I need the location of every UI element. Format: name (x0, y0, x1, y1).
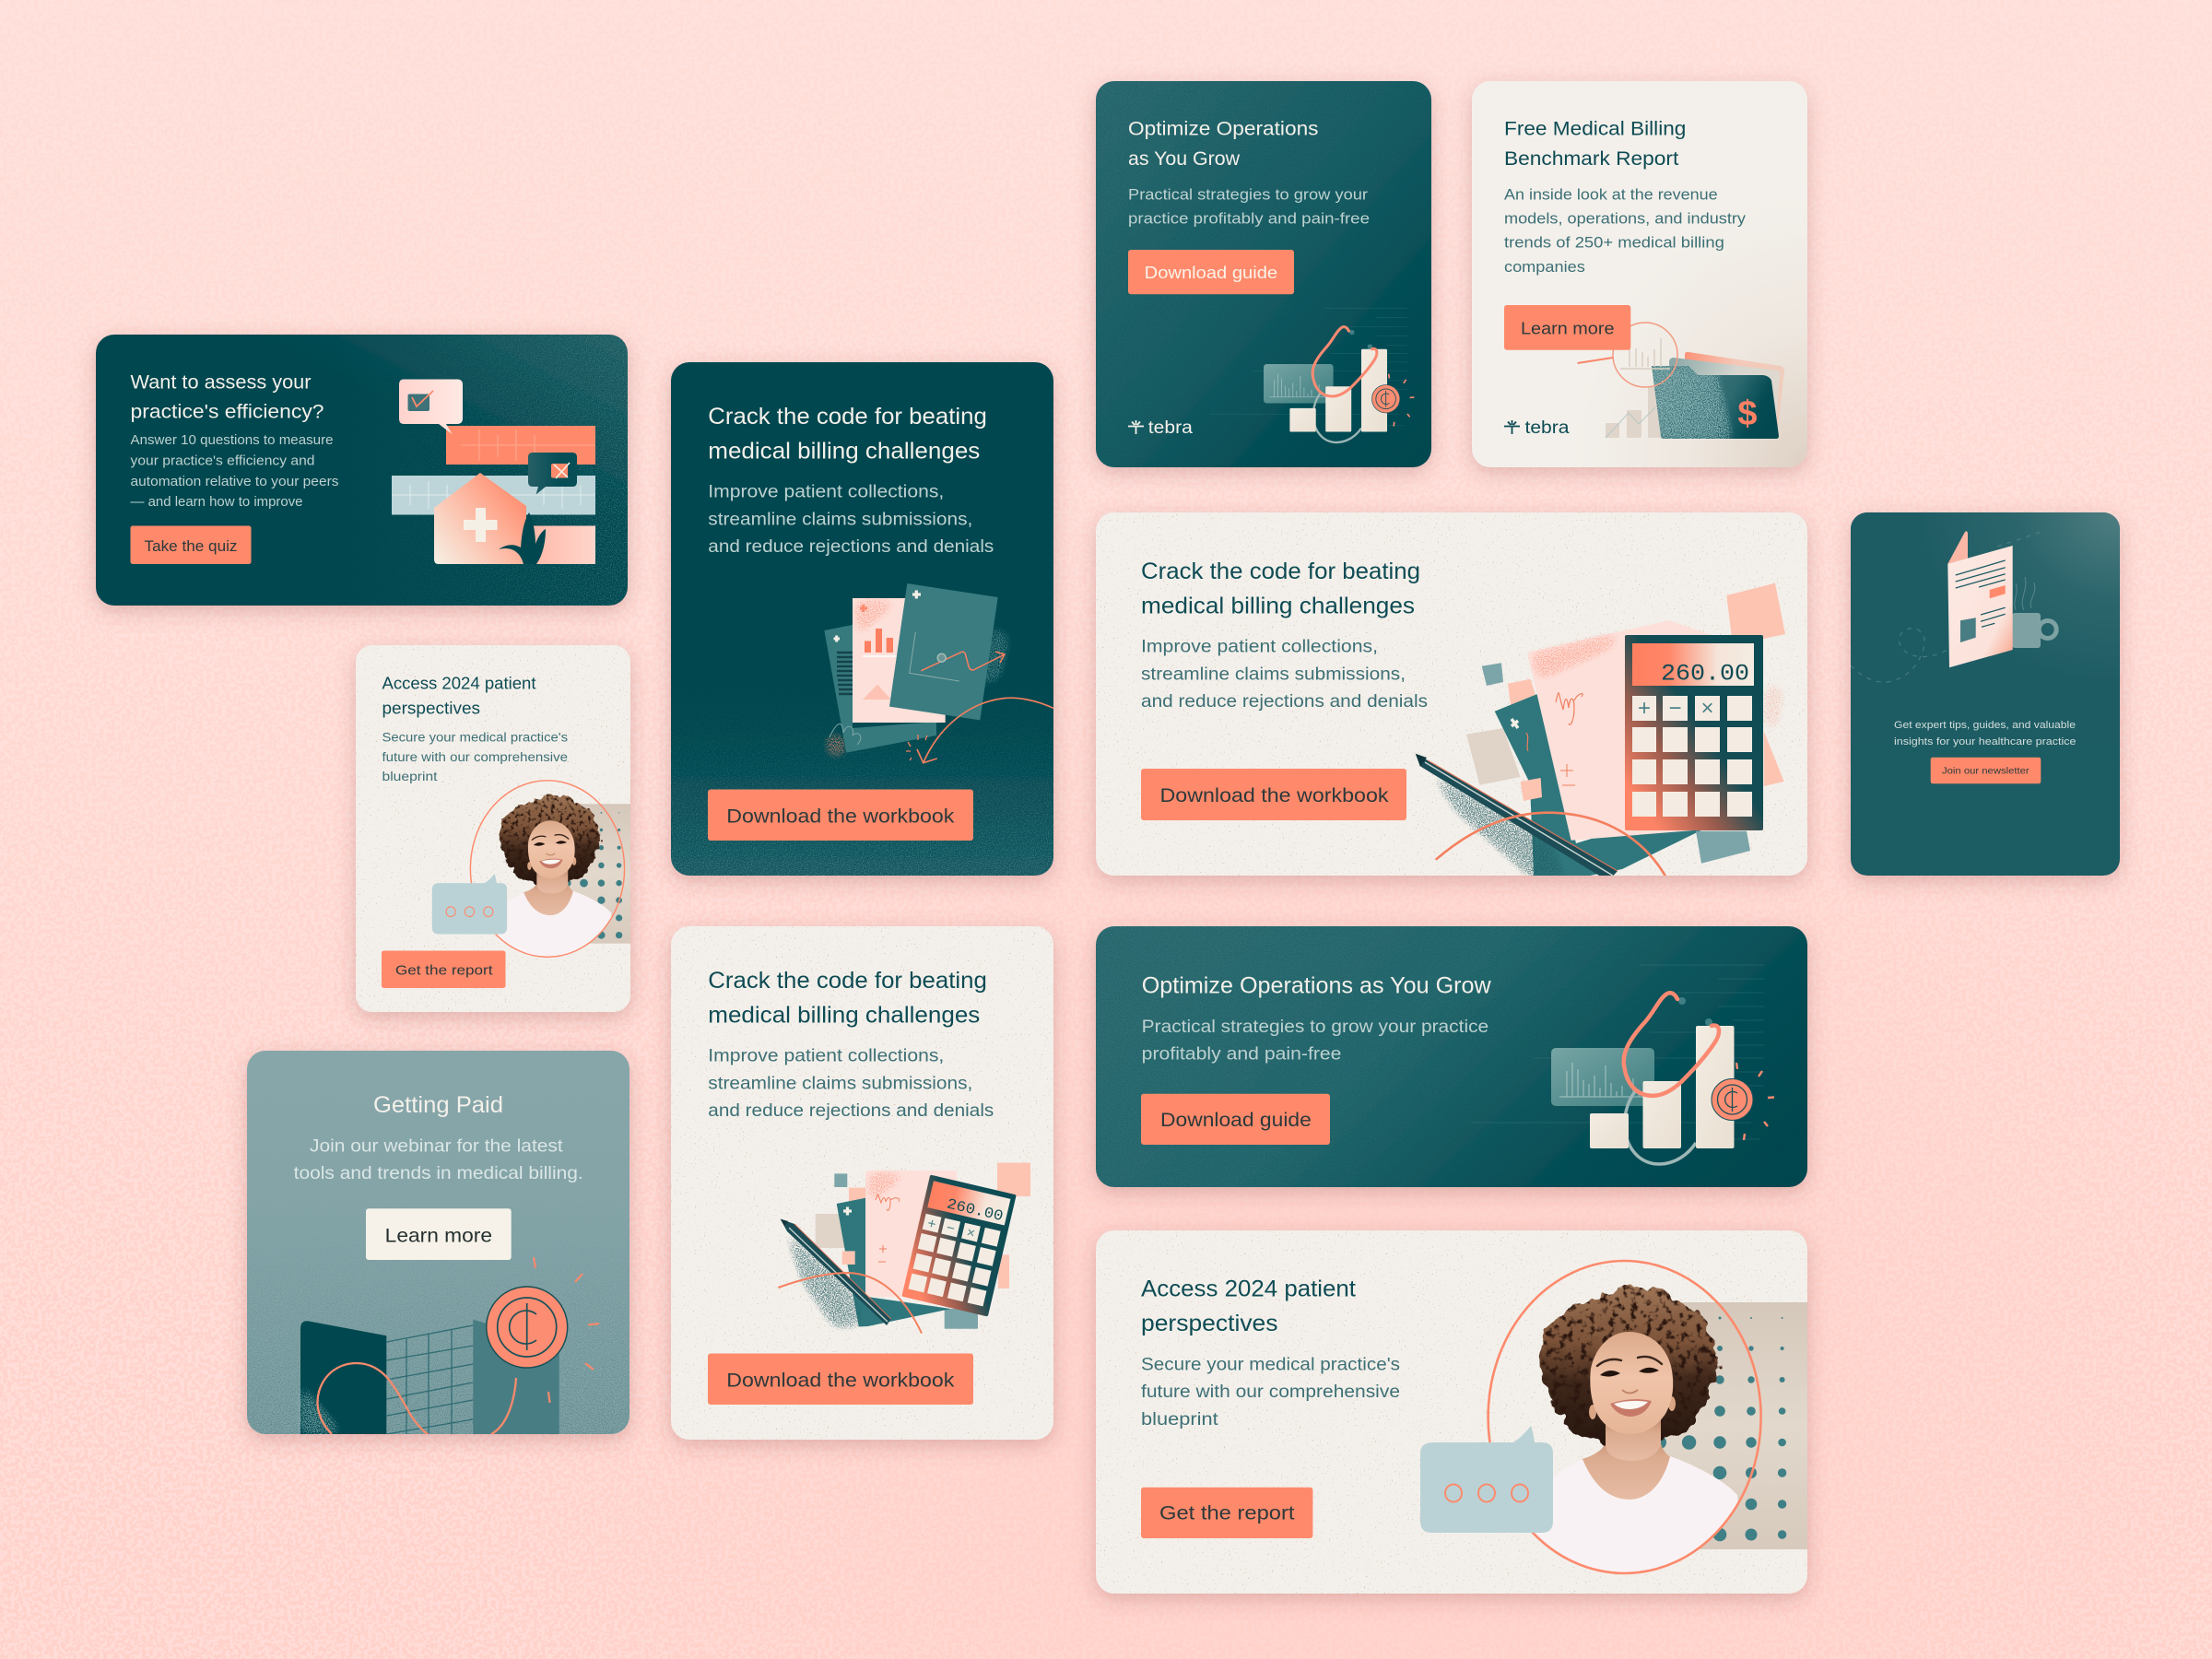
button: Join our newsletter (1942, 765, 2030, 776)
body text (1894, 720, 2076, 747)
logo: tebra: tebra (1148, 418, 1193, 438)
panel: access report card small (356, 645, 651, 1012)
body text: — and learn how to improve (131, 495, 302, 510)
body text (382, 730, 568, 783)
button (1931, 758, 2041, 783)
body text (1141, 637, 1428, 712)
button: Download the workbook (726, 1370, 955, 1391)
heading: Want to assess your (131, 371, 312, 393)
illustration: calculator, papers and pencil: − (1668, 696, 1682, 721)
button (131, 525, 251, 564)
heading: perspectives (1141, 1311, 1277, 1336)
body text: Secure your medical practice's (382, 730, 568, 745)
body text: your practice's efficiency and (131, 453, 315, 468)
heading: Crack the code for beating (1141, 559, 1420, 584)
body text: insights for your healthcare practice (1894, 736, 2076, 747)
button: Get the report (1159, 1503, 1295, 1524)
heading: Crack the code for beating (708, 404, 987, 429)
illustration: calculator and pencil: − (945, 1220, 957, 1237)
body text: Join our webinar for the latest (310, 1135, 563, 1156)
button (708, 789, 973, 841)
illustration: calculator and pencil: × (965, 1225, 977, 1241)
page background (0, 585, 2212, 1659)
heading: Benchmark Report (1504, 147, 1678, 170)
heading (708, 968, 987, 1029)
button (1141, 1488, 1312, 1538)
body text: Get expert tips, guides, and valuable (1894, 720, 2076, 731)
panel: newsletter card (1851, 512, 2120, 876)
heading: medical billing challenges (1141, 594, 1415, 619)
body text: practice profitably and pain-free (1128, 211, 1370, 228)
body text: streamline claims submissions, (708, 1073, 972, 1093)
heading (708, 404, 987, 465)
heading: Getting Paid (373, 1092, 503, 1118)
button (1504, 305, 1630, 350)
body text: streamline claims submissions, (1141, 664, 1406, 684)
logo: tebra (1128, 418, 1193, 438)
illustration: calculator and pencil: 260.00 (945, 1195, 1005, 1225)
illustration: calculator, papers and pencil: + (1638, 696, 1651, 721)
body text: companies (1504, 259, 1585, 276)
illustration: patient portrait (1420, 1261, 1807, 1585)
body text: Improve patient collections, (708, 1045, 944, 1065)
logo: tebra: tebra (1524, 418, 1570, 438)
button (1141, 1094, 1330, 1145)
body text: models, operations, and industry (1504, 211, 1747, 228)
button: Download the workbook (1159, 785, 1389, 806)
button: Download guide (1160, 1110, 1312, 1131)
panel: workbook card light (671, 926, 1053, 1440)
panel: benchmark report card (1472, 81, 1807, 467)
button (382, 951, 505, 988)
heading (1128, 118, 1318, 170)
illustration: folder and magnifier: $ (1737, 394, 1758, 433)
panel: access report wide card (1096, 1230, 1807, 1594)
illustration: calculator, papers and pencil (1416, 583, 1785, 881)
illustration: calculator, papers and pencil: 260.00 (1661, 661, 1749, 688)
panel: quiz banner (96, 335, 628, 606)
body text: blueprint (382, 770, 438, 783)
body text: Practical strategies to grow your practice (1142, 1017, 1488, 1037)
heading: Optimize Operations as You Grow (1142, 972, 1492, 998)
heading: Crack the code for beating (708, 968, 987, 994)
heading: practice's efficiency? (131, 400, 324, 422)
panel: webinar card (247, 1051, 629, 1438)
heading (382, 675, 536, 717)
logo: tebra (1504, 418, 1570, 438)
illustration: building and coin (300, 1257, 599, 1438)
heading: as You Grow (1128, 147, 1240, 170)
button: Download the workbook (726, 806, 955, 827)
heading: Free Medical Billing (1504, 118, 1686, 140)
body text: Answer 10 questions to measure (131, 433, 334, 448)
heading (1504, 118, 1686, 170)
button (366, 1208, 512, 1260)
heading: perspectives (382, 699, 480, 717)
illustration: calculator and pencil: + (926, 1216, 937, 1232)
body text: blueprint (1141, 1409, 1218, 1430)
body text (131, 433, 339, 510)
panel: workbook card dark (671, 362, 1053, 876)
body text: tools and trends in medical billing. (294, 1163, 583, 1183)
heading (1141, 1277, 1356, 1336)
heading: Optimize Operations (1128, 118, 1318, 140)
illustration: clinic with speech bubbles (392, 380, 595, 564)
heading: medical billing challenges (708, 1003, 980, 1029)
body text (708, 1045, 994, 1121)
button (708, 1353, 973, 1405)
button: Get the report (395, 962, 493, 979)
body text: and reduce rejections and denials (708, 536, 994, 557)
illustration: chart and stethoscope (1471, 965, 1774, 1164)
illustration: chart and stethoscope (1209, 308, 1414, 442)
heading (131, 371, 324, 422)
panel: optimize operations tall card (1096, 81, 1431, 467)
illustration: folder and magnifier (1578, 323, 1784, 441)
body text: future with our comprehensive (1141, 1382, 1400, 1402)
body text: future with our comprehensive (382, 750, 568, 764)
body text: trends of 250+ medical billing (1504, 235, 1724, 252)
body text: streamline claims submissions, (708, 509, 972, 529)
button: Download guide (1145, 264, 1277, 282)
illustration: patient portrait (431, 780, 630, 959)
button (1128, 250, 1294, 294)
heading: Access 2024 patient (1141, 1277, 1356, 1302)
body text: and reduce rejections and denials (708, 1100, 994, 1121)
panel: optimize operations wide card (1096, 926, 1807, 1187)
body text: and reduce rejections and denials (1141, 691, 1428, 712)
body text (294, 1135, 583, 1183)
body text: profitably and pain-free (1142, 1044, 1342, 1065)
body text (1141, 1355, 1400, 1430)
panel: workbook wide card (1096, 512, 1807, 881)
body text: Improve patient collections, (1141, 637, 1378, 657)
body text (1142, 1017, 1488, 1065)
heading: Access 2024 patient (382, 675, 536, 693)
body text: An inside look at the revenue (1504, 187, 1718, 204)
body text (708, 481, 994, 557)
body text: Secure your medical practice's (1141, 1355, 1400, 1375)
button: Learn more (1521, 319, 1615, 337)
illustration: documents and arrow (824, 583, 1053, 763)
heading: medical billing challenges (708, 439, 980, 465)
illustration: newspaper and coffee mug (1851, 531, 2056, 682)
body text (1504, 187, 1747, 276)
button: Take the quiz (144, 538, 238, 555)
body text: Improve patient collections, (708, 481, 944, 501)
button: Learn more (385, 1225, 492, 1246)
heading (1141, 559, 1420, 619)
illustration: calculator, papers and pencil: × (1700, 696, 1714, 721)
body text (1128, 187, 1370, 228)
body text: Practical strategies to grow your (1128, 187, 1369, 204)
button (1141, 769, 1406, 820)
body text: automation relative to your peers (131, 475, 339, 489)
illustration: calculator and pencil (778, 1163, 1030, 1333)
